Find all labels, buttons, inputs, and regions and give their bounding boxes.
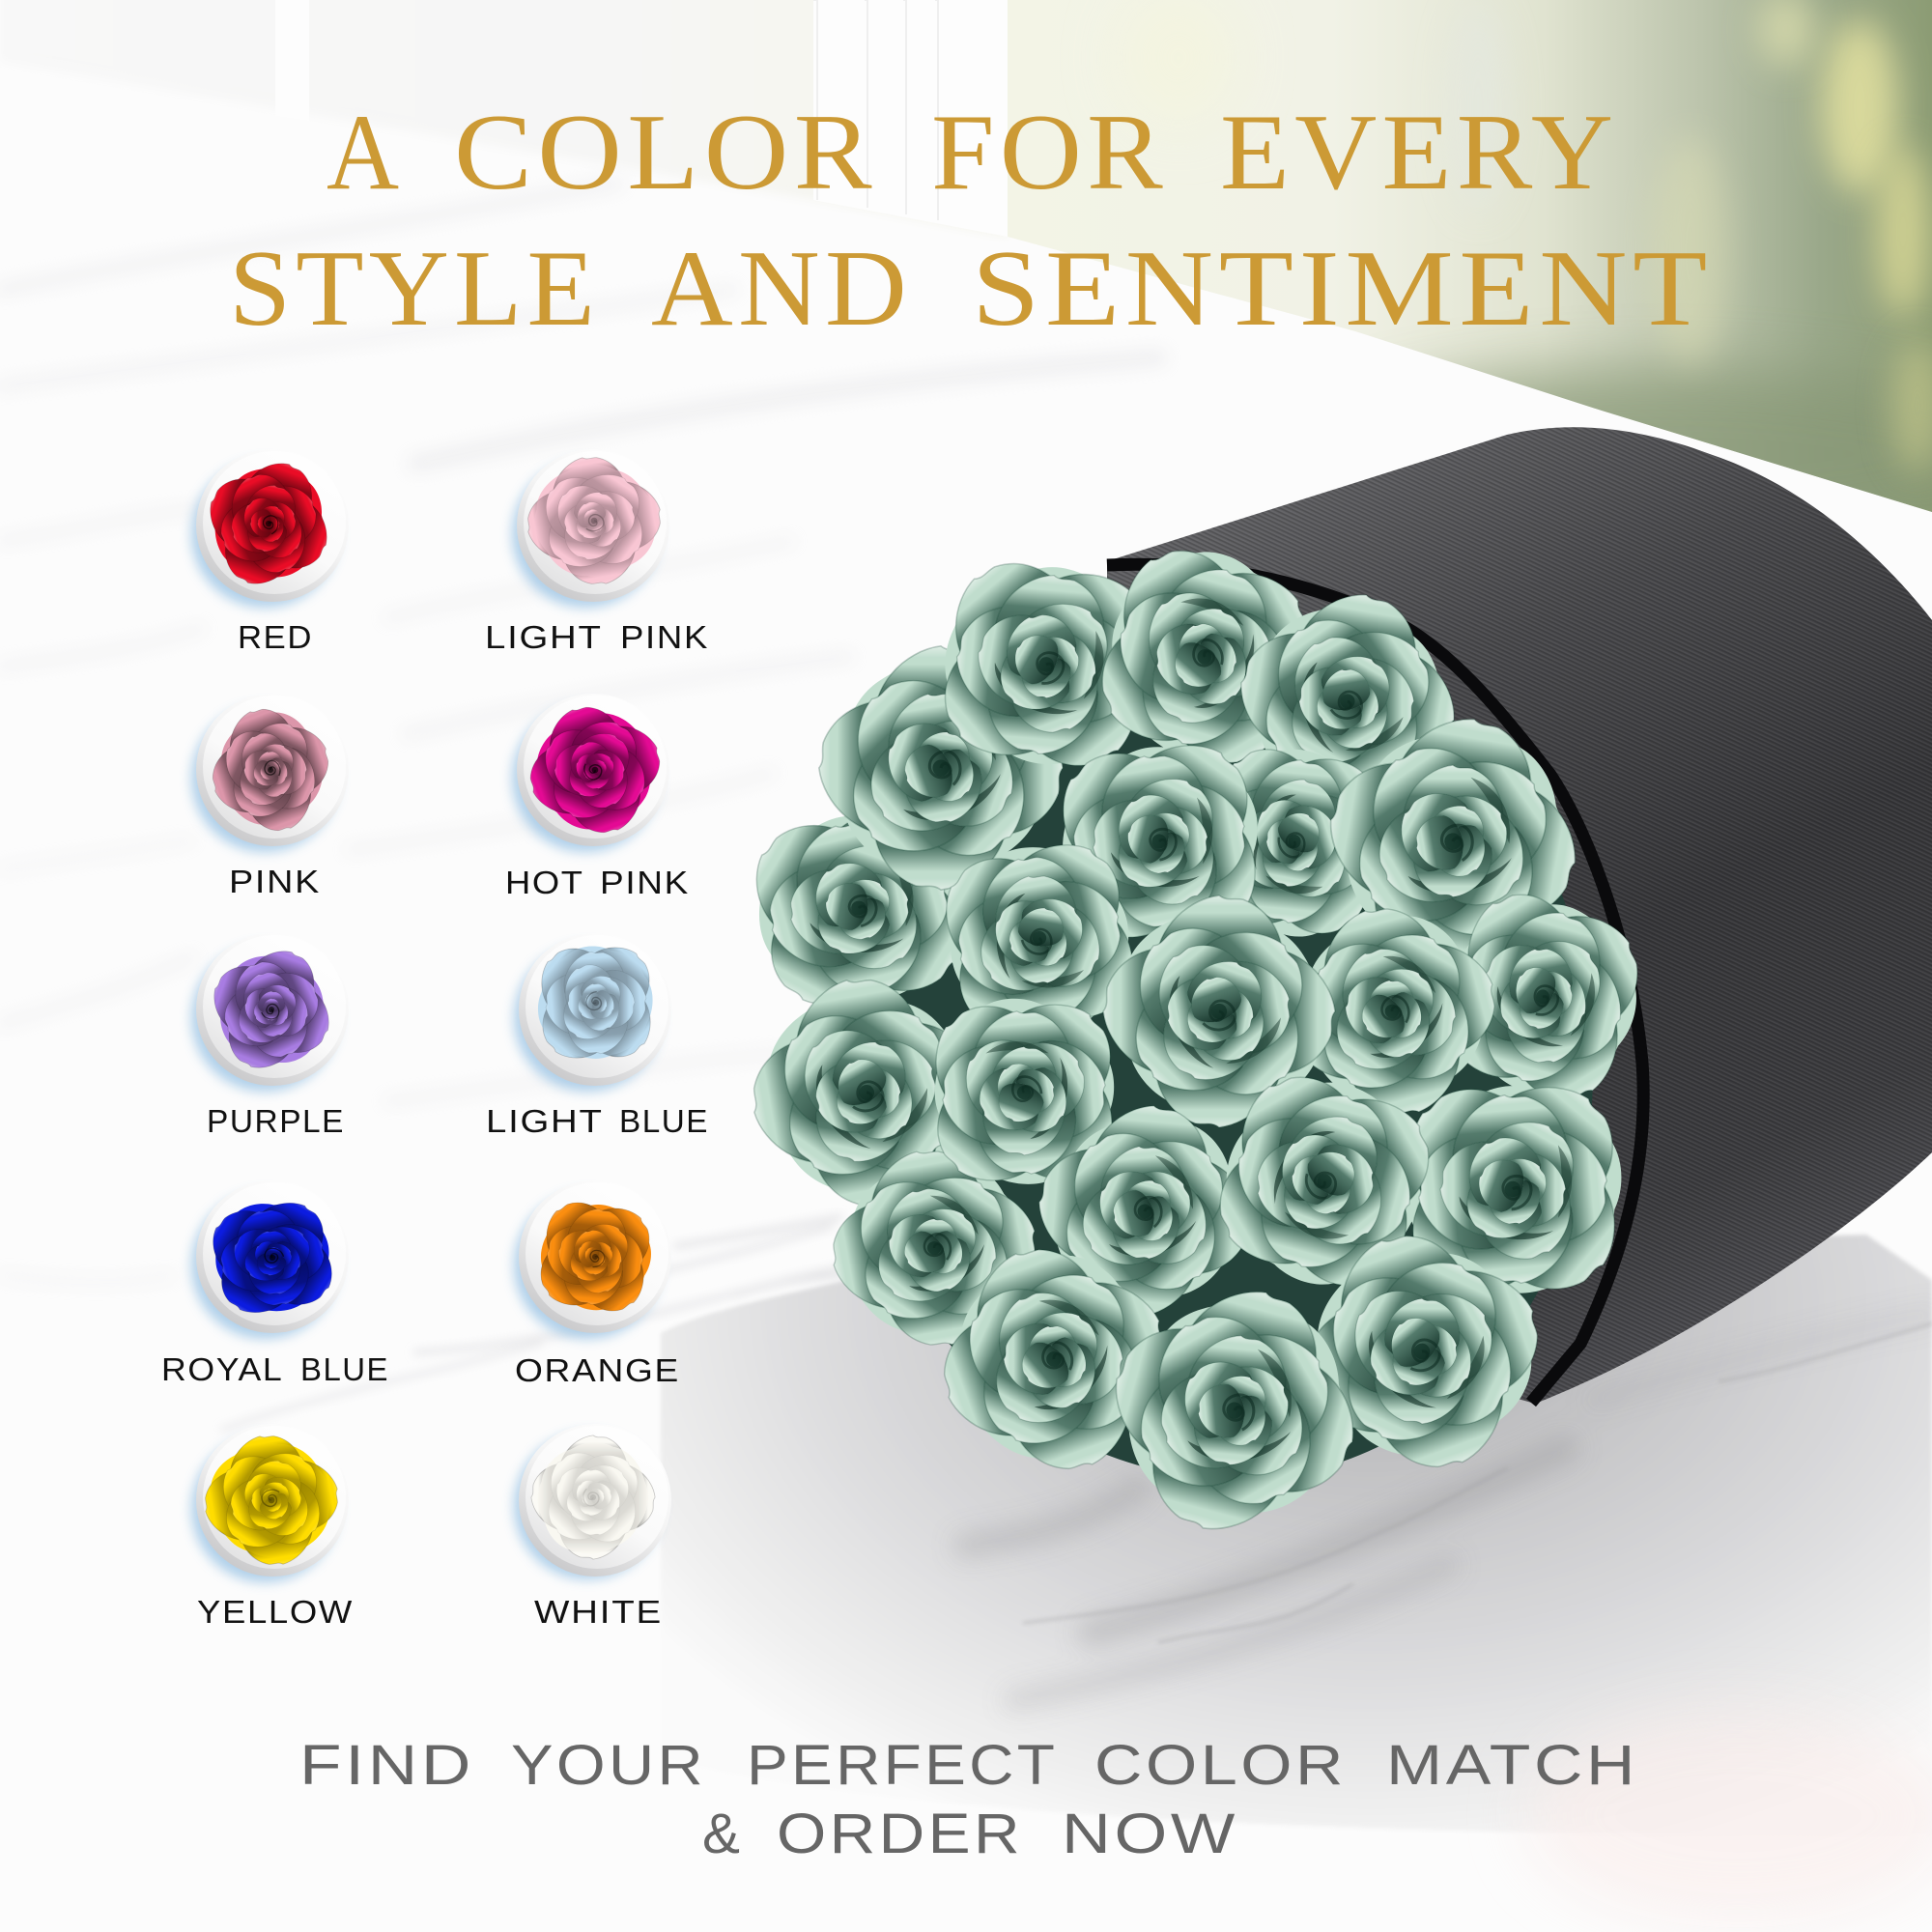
label: ROYAL — [161, 1351, 282, 1387]
call to action: ORDER — [777, 1803, 1023, 1865]
label: ORANGE — [515, 1352, 680, 1388]
title: COLOR — [454, 93, 877, 213]
faint pink glow — [1526, 1710, 1932, 1922]
bouquet backing — [729, 515, 1686, 1562]
label: LIGHT — [485, 619, 602, 655]
swatch: light blue — [486, 910, 709, 1139]
icon: yellow rose — [168, 1401, 375, 1600]
icon: purple rose — [204, 941, 339, 1078]
call to action: COLOR — [1094, 1734, 1347, 1797]
label: RED — [238, 619, 313, 655]
call to action: PERFECT — [747, 1734, 1057, 1797]
title: A — [327, 93, 399, 213]
call to action: NOW — [1062, 1803, 1238, 1865]
title: EVERY — [1220, 93, 1614, 213]
title: SENTIMENT — [972, 229, 1713, 349]
label: BLUE — [619, 1103, 709, 1139]
button disc — [514, 933, 671, 1092]
label: BLUE — [300, 1351, 389, 1387]
label: PINK — [600, 865, 690, 900]
icon: white rose — [503, 1407, 683, 1587]
label: HOT — [505, 865, 583, 900]
title: FOR — [931, 93, 1168, 213]
swatch: royal blue — [161, 1179, 389, 1387]
window view: blurred garden — [1008, 0, 1932, 541]
wall behind table — [0, 0, 1008, 237]
button disc — [514, 1424, 671, 1579]
icon: light pink rose — [491, 422, 697, 619]
button disc — [191, 1180, 349, 1339]
call to action: MATCH — [1386, 1734, 1638, 1797]
swatch: hot pink — [491, 668, 699, 900]
product: hat box with mint roses — [692, 427, 1932, 1562]
button disc — [191, 1424, 349, 1582]
label: PURPLE — [207, 1103, 345, 1139]
label: LIGHT — [486, 1103, 603, 1139]
label: PINK — [620, 619, 709, 655]
swatch: red — [191, 449, 349, 655]
cast shadows and table veins — [966, 1314, 1932, 1700]
swatch: purple — [191, 933, 349, 1139]
icon: orange rose — [503, 1165, 687, 1349]
label: WHITE — [534, 1594, 663, 1630]
call to action: & — [702, 1803, 743, 1865]
icon: pink rose — [177, 671, 364, 868]
swatch: orange — [503, 1165, 687, 1388]
icon: red rose — [200, 453, 337, 594]
button disc — [512, 694, 669, 852]
icon: hot pink rose — [491, 668, 699, 871]
button disc — [191, 933, 349, 1092]
button disc — [191, 694, 349, 852]
label: PINK — [229, 864, 321, 899]
marble veins — [0, 184, 1159, 1283]
title: AND — [651, 229, 912, 349]
title: STYLE — [229, 229, 600, 349]
call to action: FIND — [299, 1734, 474, 1797]
call to action: YOUR — [511, 1734, 706, 1797]
swatch: light pink — [485, 422, 709, 655]
mint roses — [692, 479, 1701, 1559]
icon: light blue rose — [505, 910, 687, 1095]
button disc — [512, 449, 669, 608]
black hat box — [1107, 427, 1932, 1404]
button disc — [191, 449, 349, 608]
icon: royal blue rose — [187, 1179, 357, 1336]
label: YELLOW — [197, 1594, 354, 1630]
swatch: pink — [177, 671, 364, 899]
table surface in shadow — [661, 1235, 1932, 1835]
swatch: yellow — [168, 1401, 375, 1630]
button disc — [514, 1180, 671, 1339]
swatch: white — [503, 1407, 683, 1630]
